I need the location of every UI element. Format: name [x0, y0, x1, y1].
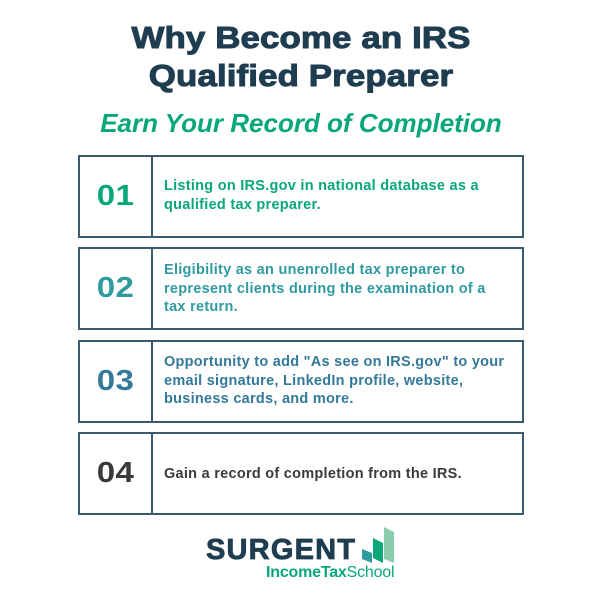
logo tagline: IncomeTaxSchool [266, 564, 394, 581]
text 03: email signature, LinkedIn profile, website, [164, 372, 463, 388]
title: Qualified Preparer [149, 58, 453, 93]
panel: item 04 [78, 432, 524, 515]
text 03: business cards, and more. [164, 391, 354, 407]
subtitle: Earn Your Record of Completion [100, 108, 502, 138]
panel: item 03 [78, 340, 524, 423]
title [130, 20, 471, 93]
number 04: 04 [97, 457, 134, 489]
text 03 [164, 354, 504, 407]
text 01: qualified tax preparer. [164, 196, 321, 212]
number 02: 02 [97, 272, 134, 304]
icon: rising bars [362, 527, 394, 563]
logo: Surgent Income Tax School [206, 527, 394, 581]
text 02: Eligibility as an unenrolled tax preparer to [164, 262, 465, 278]
text 03: Opportunity to add "As see on IRS.gov" to your [164, 354, 504, 370]
title: Why Become an IRS [131, 20, 471, 55]
text 02: tax return. [164, 299, 238, 315]
text 01 [164, 178, 479, 212]
text 02 [164, 262, 486, 315]
panel: item 02 [78, 247, 524, 330]
logo wordmark: SURGENT [206, 534, 356, 566]
text 04: Gain a record of completion from the IRS. [164, 466, 462, 482]
text 01: Listing on IRS.gov in national database as a [164, 178, 479, 194]
text 02: represent clients during the examination of a [164, 280, 486, 296]
number 03: 03 [97, 365, 134, 397]
number 01: 01 [97, 180, 134, 212]
panel: item 01 [78, 155, 524, 238]
